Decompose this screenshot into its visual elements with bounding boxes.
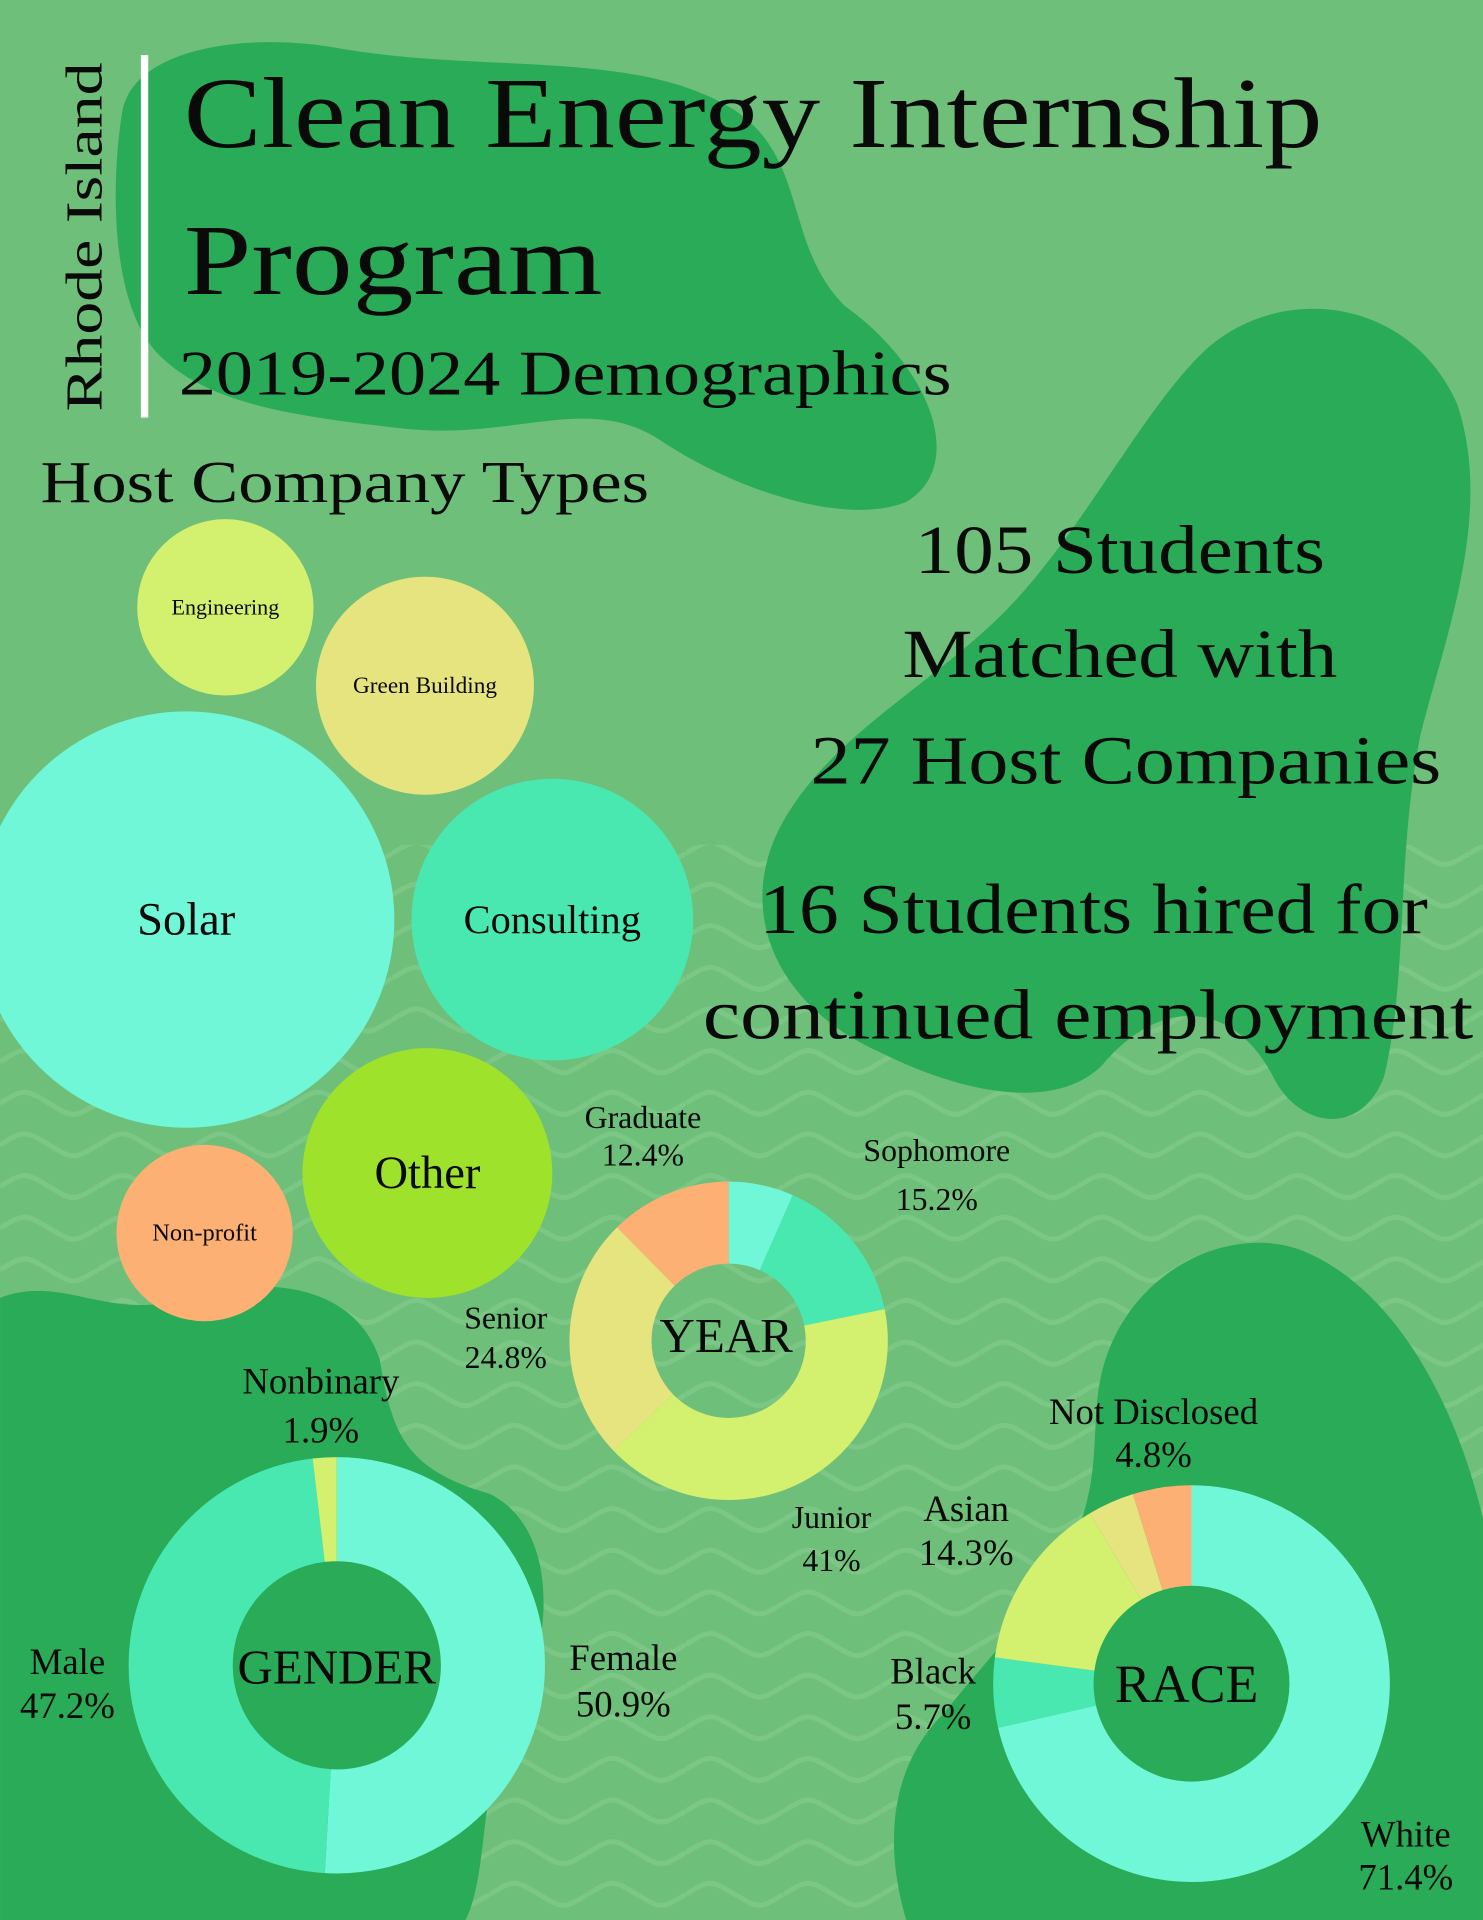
donut: RACE bbox=[890, 1391, 1453, 1897]
bubble chart: host company types: Solar bbox=[137, 894, 236, 945]
donut: RACE: 5.7% bbox=[895, 1696, 971, 1737]
donut: RACE: White bbox=[1361, 1814, 1451, 1855]
title: Clean Energy Internship bbox=[184, 58, 1323, 169]
stats text: 16 Students hired for bbox=[759, 871, 1428, 949]
bubble chart: host company types: Green Building bbox=[353, 673, 497, 699]
subtitle vertical: Rhode Island: Rhode Island bbox=[57, 62, 114, 411]
bubble chart: host company types: Other bbox=[374, 1148, 481, 1199]
bubble chart: host company types: Consulting bbox=[464, 897, 641, 942]
donut: GENDER: Female bbox=[569, 1637, 677, 1678]
bubble chart: host company types: Non-profit bbox=[152, 1219, 257, 1246]
donut: RACE: RACE bbox=[1115, 1654, 1258, 1714]
donut: YEAR: Junior bbox=[792, 1500, 872, 1535]
donut: GENDER: 1.9% bbox=[283, 1409, 359, 1450]
blob: right bbox=[762, 309, 1470, 1119]
donut: RACE: 4.8% bbox=[1115, 1434, 1192, 1475]
donut: YEAR: YEAR bbox=[660, 1308, 793, 1363]
donut: YEAR: 12.4% bbox=[602, 1138, 684, 1173]
donut: GENDER bbox=[20, 1360, 677, 1821]
donut: YEAR: Senior bbox=[464, 1301, 548, 1336]
donut: GENDER: 50.9% bbox=[576, 1684, 671, 1725]
bubble chart: host company types: Engineering bbox=[172, 595, 279, 620]
donut: YEAR: Graduate bbox=[585, 1100, 701, 1135]
stats text bbox=[703, 512, 1473, 1054]
donut: RACE: 14.3% bbox=[919, 1532, 1014, 1573]
title: 2019-2024 Demographics bbox=[179, 337, 952, 408]
stats text: Matched with bbox=[903, 616, 1337, 692]
donut: YEAR bbox=[464, 1100, 1010, 1578]
donut: GENDER: GENDER bbox=[238, 1640, 436, 1695]
divider line bbox=[141, 55, 148, 418]
stats text: 27 Host Companies bbox=[811, 723, 1441, 799]
donut: RACE: Black bbox=[890, 1651, 977, 1692]
donut: GENDER: 47.2% bbox=[20, 1685, 115, 1726]
title bbox=[179, 58, 1323, 408]
blob: bottom left bbox=[0, 1286, 544, 1920]
stats text: 105 Students bbox=[915, 512, 1325, 588]
donut: GENDER: Male bbox=[30, 1641, 105, 1682]
donut: GENDER: Nonbinary bbox=[242, 1360, 400, 1401]
donut: YEAR: Sophomore bbox=[863, 1133, 1010, 1168]
blob: top bbox=[116, 42, 937, 510]
bubble chart: host company types bbox=[0, 519, 693, 1321]
donut: RACE: Not Disclosed bbox=[1049, 1391, 1258, 1432]
heading: Host Company Types: Host Company Types bbox=[40, 450, 649, 515]
title: Program bbox=[184, 205, 603, 316]
stats text: continued employment bbox=[703, 976, 1473, 1054]
donut: YEAR: 41% bbox=[802, 1543, 861, 1578]
donut: RACE: Asian bbox=[923, 1488, 1009, 1529]
donut: YEAR: 24.8% bbox=[465, 1340, 547, 1375]
donut: RACE: 71.4% bbox=[1358, 1856, 1453, 1897]
donut: YEAR: 15.2% bbox=[896, 1182, 978, 1217]
blob: bottom right bbox=[894, 1243, 1483, 1920]
